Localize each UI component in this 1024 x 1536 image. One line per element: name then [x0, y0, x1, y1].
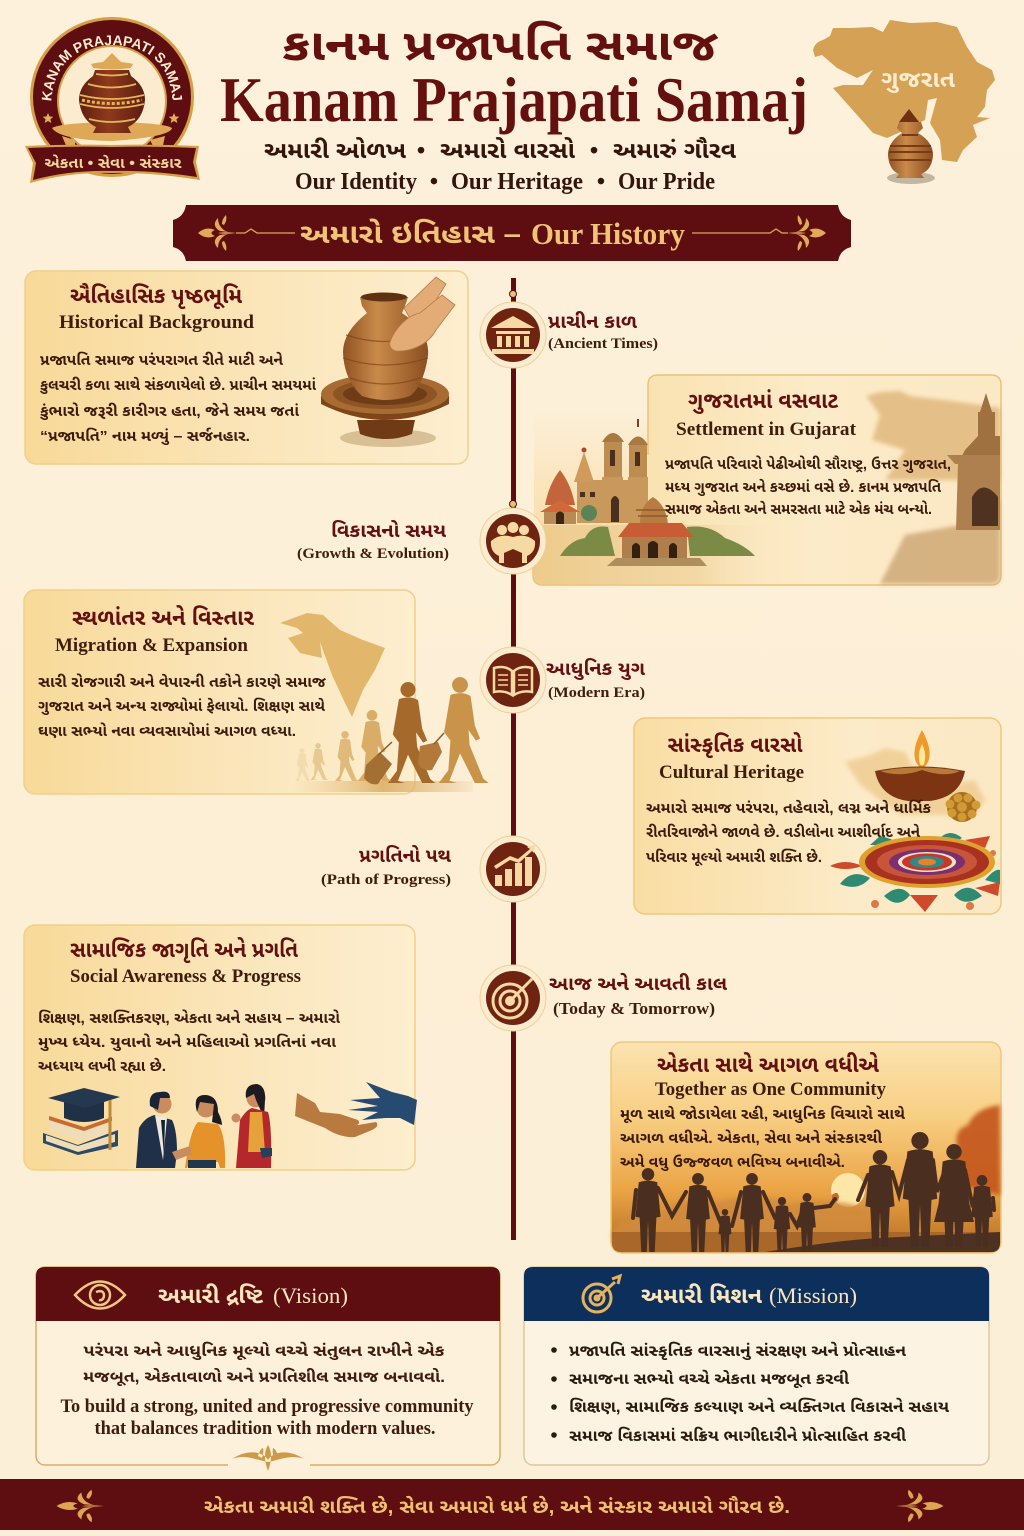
subheading: Together as One Community	[655, 1079, 886, 1100]
illustration: books and graduation cap	[43, 1088, 120, 1155]
body text: “પ્રજાપતિ” નામ મળ્યું – સર્જનહાર.	[40, 427, 250, 445]
illustration: potter's hands	[390, 277, 455, 351]
panel: Social Awareness & Progress	[24, 925, 417, 1170]
body text: અધ્યાય લખી રહ્યા છે.	[38, 1057, 166, 1075]
vision body: પરંપરા અને આધુનિક મૂલ્યો વચ્ચે સંતુલન રાખીને એક	[84, 1341, 445, 1360]
illustration: distant hills	[866, 391, 1000, 480]
vision body: મજબૂત, એકતાવાળો અને પ્રગતિશીલ સમાજ બનાવવો.	[83, 1367, 445, 1386]
vision header bar	[36, 1267, 500, 1321]
body text: મૂળ સાથે જોડાયેલા રહી, આધુનિક વિચારો સાથે	[620, 1105, 906, 1123]
icon: target with arrow	[493, 979, 532, 1018]
heading: ગુજરાતમાં વસવાટ	[688, 388, 838, 414]
body text: પરિવાર મૂલ્યો અમારી શક્તિ છે.	[646, 848, 822, 866]
body text: કુલચરી કળા સાથે સંકળાયેલો છે. પ્રાચીન સમયમાં	[39, 376, 317, 394]
body text: સમાજ એકતા અને સમરસતા માટે એક મંચ બન્યો.	[665, 500, 932, 518]
body text: ગુજરાત અને અન્ય રાજ્યોમાં ફેલાયો. શિક્ષણ સાથે	[38, 697, 326, 715]
body text: રીતરિવાજોને જાળવે છે. વડીલોના આશીર્વાદ અને	[646, 823, 921, 841]
tagline: Gujarati: •	[590, 137, 598, 163]
illustration: distant hills	[612, 1197, 870, 1240]
body text	[38, 673, 327, 740]
subheading: Settlement in Gujarat	[676, 419, 857, 440]
body text: આગળ વધીએ. એકતા, સેવા અને સંસ્કારથી	[620, 1129, 883, 1147]
mission heading: Gujarati: અમારી મિશન	[641, 1283, 763, 1308]
footer motto: એકતા અમારી શક્તિ છે, સેવા અમારો ધર્મ છે, અને સંસ્કાર અમારો ગૌરવ છે.	[204, 1494, 790, 1518]
panel: Migration & Expansion	[24, 590, 489, 794]
timeline label: Ancient Times: (Ancient Times)	[548, 336, 658, 352]
mission list	[551, 1341, 950, 1445]
body text: સારી રોજગારી અને વેપારની તકોને કારણે સમાજ	[38, 673, 327, 691]
illustration: potter's wheel with pot	[321, 277, 455, 447]
illustration: family silhouettes	[633, 1132, 994, 1252]
illustration: marigold flower	[946, 792, 980, 822]
illustration: ground strip	[293, 781, 473, 792]
footer flourish right	[896, 1490, 944, 1522]
mission list: સમાજના સભ્યો વચ્ચે એકતા મજબૂત કરવી	[569, 1369, 849, 1388]
tagline: Gujarati: અમારી ઓળખ	[264, 137, 406, 163]
illustration: church left	[574, 419, 648, 523]
timeline label: Growth & Evolution	[297, 519, 449, 562]
logo ribbon: એકતા • સેવા • સંસ્કાર	[44, 154, 182, 172]
logo: Kanam Prajapati Samaj emblem	[25, 17, 200, 183]
tagline: Gujarati: •	[417, 137, 425, 163]
panel: Settlement in Gujarat	[533, 375, 1001, 585]
illustration: sun	[831, 1173, 865, 1207]
illustration: suitcases	[366, 768, 386, 784]
logo potter's stand	[52, 122, 172, 150]
title: English: Kanam Prajapati Samaj	[220, 65, 808, 135]
illustration: rangoli	[830, 833, 1000, 912]
illustration: helping hands	[295, 1082, 417, 1137]
illustration: bushes	[560, 526, 755, 556]
footer flourish left	[56, 1490, 104, 1522]
vision heading: English: (Vision)	[273, 1283, 348, 1308]
body text	[39, 351, 317, 445]
mission heading: English: (Mission)	[769, 1283, 857, 1308]
timeline label: Modern Era: આધુનિક યુગ	[546, 657, 645, 680]
timeline node: Today & Tomorrow	[480, 965, 546, 1031]
body text: ઘણા સભ્યો નવા વ્યવસાયોમાં આગળ વધ્યા.	[38, 723, 296, 740]
timeline label: Modern Era: (Modern Era)	[548, 685, 645, 701]
title: Gujarati: કાનમ પ્રજાપતિ સમાજ	[282, 20, 719, 70]
illustration: autumn tree	[952, 1105, 1000, 1195]
illustration: ground	[612, 1232, 1000, 1252]
subheading: Migration & Expansion	[55, 635, 248, 656]
timeline label: Path of Progress: (Path of Progress)	[321, 872, 451, 888]
icon: rising bars	[494, 845, 535, 886]
faded left wash	[534, 410, 649, 540]
timeline node: Path of Progress	[480, 836, 546, 902]
timeline label: Today & Tomorrow: (Today & Tomorrow)	[553, 999, 715, 1018]
panel: Together as One Community	[611, 1042, 1001, 1253]
timeline label: Growth & Evolution: (Growth & Evolution)	[297, 546, 449, 562]
illustration: small temple left	[540, 470, 580, 524]
panel: Mission	[524, 1267, 989, 1465]
illustration: three people shaking hands	[136, 1084, 272, 1168]
timeline label: Path of Progress	[321, 844, 452, 888]
illustration: cloud wash	[845, 748, 985, 815]
heading: સ્થળાંતર અને વિસ્તાર	[72, 605, 255, 630]
logo: Kanam Prajapati Samaj emblem: KANAM PRAJAPATI SAMAJ	[42, 35, 182, 101]
tagline: English: Our Pride	[618, 169, 715, 195]
icon: people in hands	[491, 522, 535, 563]
body text	[646, 799, 931, 866]
body text: પ્રજાપતિ પરિવારો પેઢીઓથી સૌરાષ્ટ્ર, ઉત્તર ગુજરાત,	[665, 455, 951, 473]
body text	[620, 1105, 906, 1171]
section banner: Our History	[173, 205, 851, 261]
vision body: To build a strong, united and progressive community	[60, 1396, 474, 1417]
illustration: diya lamp	[875, 730, 965, 801]
illustration: migrating silhouettes	[295, 677, 489, 784]
body text: કુંભારો જરૂરી કારીગર હતા, જેને સમય જતાં	[39, 402, 300, 420]
mission list: સમાજ વિકાસમાં સક્રિય ભાગીદારીને પ્રોત્સાહિત કરવી	[569, 1426, 906, 1445]
vision body: that balances tradition with modern values.	[94, 1418, 436, 1439]
vision heading: Gujarati: અમારી દ્રષ્ટિ	[158, 1283, 264, 1308]
logo stars	[43, 113, 179, 123]
body text: પ્રજાપતિ સમાજ પરંપરાગત રીતે માટી અને	[40, 351, 284, 369]
tagline: English: •	[430, 169, 438, 195]
timeline label: Today & Tomorrow	[549, 971, 728, 1018]
timeline node: Modern Era	[480, 647, 546, 713]
mission header bar	[524, 1267, 989, 1321]
icon: open book	[494, 667, 532, 695]
timeline spine	[510, 278, 516, 1240]
timeline label: Path of Progress: પ્રગતિનો પથ	[359, 844, 452, 867]
tagline: English: Our Identity	[295, 169, 417, 195]
body text	[665, 455, 951, 518]
tagline: Gujarati	[264, 137, 737, 163]
illustration: sandstone temple right	[947, 393, 1000, 530]
map label: ગુજરાત	[881, 66, 956, 93]
tagline: English	[295, 169, 715, 195]
body text: મધ્ય ગુજરાત અને કચ્છમાં વસે છે. કાનમ પ્રજાપતિ	[665, 478, 941, 496]
body text: શિક્ષણ, સશક્તિકરણ, એકતા અને સહાય – અમારો	[38, 1009, 341, 1027]
illustration: faded Gujarat and India map	[280, 613, 385, 717]
timeline label: Modern Era	[546, 657, 645, 701]
heading: એકતા સાથે આગળ વધીએ	[657, 1052, 879, 1077]
timeline node: Ancient Times	[480, 302, 546, 368]
map pot	[887, 109, 935, 184]
icon: temple columns	[491, 316, 535, 354]
banner text: English: Our History	[531, 216, 685, 251]
mission list: શિક્ષણ, સામાજિક કલ્યાણ અને વ્યક્તિગત વિકાસને સહાય	[569, 1397, 950, 1416]
tagline: English: Our Heritage	[451, 169, 583, 195]
icon: target	[583, 1276, 620, 1312]
timeline node: Growth & Evolution	[480, 508, 546, 574]
footer band	[0, 1479, 1024, 1530]
tagline: English: •	[597, 169, 605, 195]
body text: મુખ્ય ધ્યેય. યુવાનો અને મહિલાઓ પ્રગતિનાં નવા	[38, 1033, 337, 1051]
vision body	[60, 1341, 474, 1439]
panel: Cultural Heritage	[634, 718, 1001, 914]
timeline label: Today & Tomorrow: આજ અને આવતી કાલ	[549, 971, 728, 995]
subheading: Cultural Heritage	[659, 762, 804, 783]
panel: Historical Background	[25, 271, 468, 464]
icon: eye	[75, 1282, 125, 1308]
body text: અમારો સમાજ પરંપરા, તહેવારો, લગ્ન અને ધાર્મિક	[646, 799, 931, 817]
timeline label: Ancient Times	[548, 310, 658, 352]
vision ornament	[228, 1445, 310, 1472]
body text: અમે વધુ ઉજ્જવળ ભવિષ્ય બનાવીએ.	[620, 1153, 845, 1171]
panel: Vision	[36, 1267, 500, 1472]
title block	[220, 20, 808, 195]
banner text: Gujarati: અમારો ઇતિહાસ –	[300, 218, 521, 249]
tagline: Gujarati: અમારો વારસો	[440, 137, 575, 163]
subheading: Social Awareness & Progress	[70, 966, 301, 987]
logo pot	[79, 53, 145, 133]
logo ribbon	[25, 145, 200, 183]
icon: Gujarat map with pot	[813, 20, 995, 184]
subheading: Historical Background	[59, 312, 254, 333]
timeline label: Ancient Times: પ્રાચીન કાળ	[548, 310, 638, 333]
body text	[38, 1009, 341, 1075]
heading: સામાજિક જાગૃતિ અને પ્રગતિ	[70, 937, 298, 963]
timeline label: Growth & Evolution: વિકાસનો સમય	[331, 519, 447, 542]
illustration: front temple	[607, 497, 707, 566]
illustration: right ground	[880, 500, 1000, 584]
heading: ઐતિહાસિક પૃષ્ઠભૂમિ	[70, 283, 242, 309]
heading: સાંસ્કૃતિક વારસો	[668, 732, 803, 758]
tagline: Gujarati: અમારું ગૌરવ	[613, 137, 737, 163]
mission list: પ્રજાપતિ સાંસ્કૃતિક વારસાનું સંરક્ષણ અને પ્રોત્સાહન	[569, 1341, 906, 1360]
